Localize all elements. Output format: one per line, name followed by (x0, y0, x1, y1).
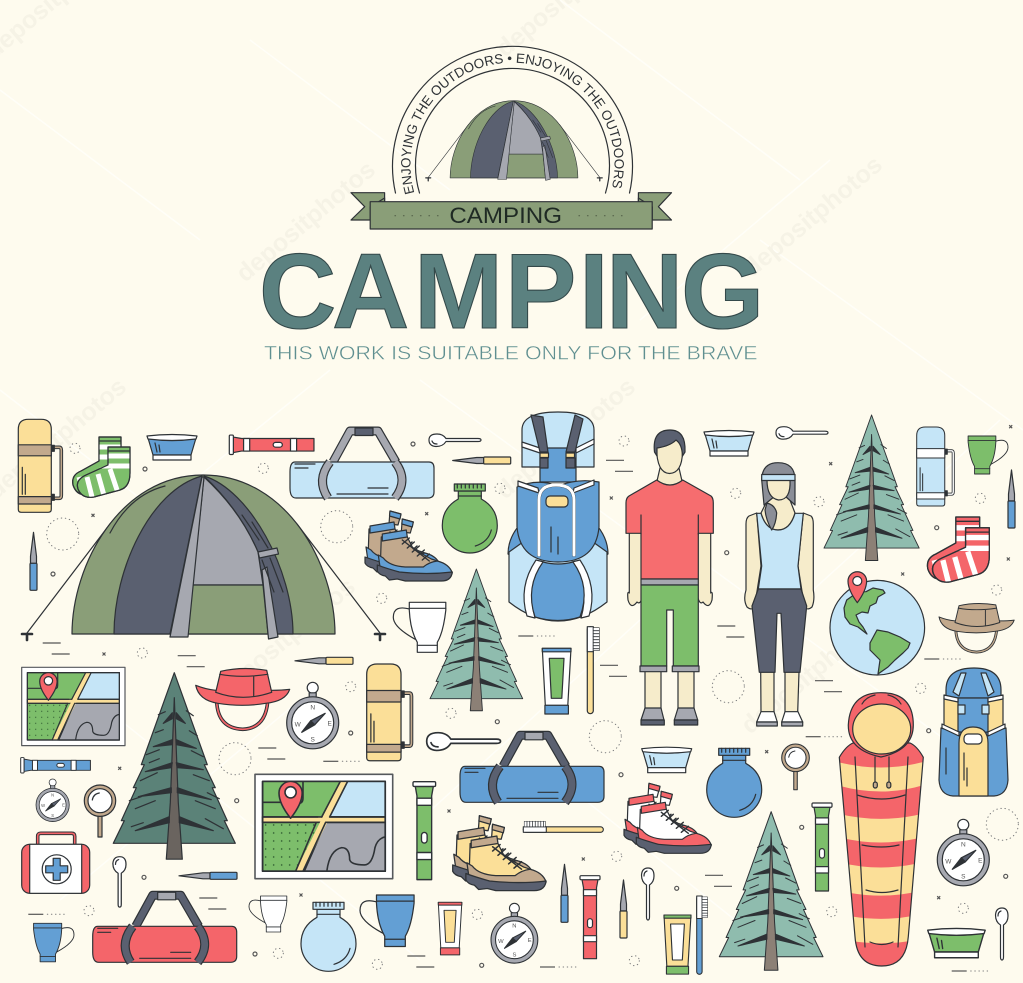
ribbon folds (370, 198, 652, 207)
icon: toothpaste yellow (664, 915, 691, 974)
icon: pine tree top right (824, 415, 919, 560)
stock photo watermark: depositphotos (211, 572, 361, 705)
icon: compass right: W (945, 858, 952, 865)
icon: small compass: E (62, 803, 65, 808)
icon: small compass: W (41, 803, 45, 808)
icon: green canteen (442, 484, 497, 553)
stock photo watermark: depositphotos (231, 155, 381, 288)
bag hood (848, 693, 913, 757)
woman left shoe (757, 712, 777, 722)
icon: compass right (937, 819, 989, 886)
man belt (641, 579, 698, 585)
icon: magnifier left (84, 785, 116, 837)
icon: red flashlight (229, 435, 314, 454)
stock photo watermark: depositphotos (738, 150, 888, 283)
icon: sleeping bag (838, 692, 924, 967)
icon: blue knife right (1008, 470, 1015, 528)
icon: spoon top right (776, 427, 828, 439)
icon: dark pine tree (113, 673, 235, 859)
icon: toothbrush yellow (587, 627, 599, 714)
icon: small backpack (939, 668, 1008, 796)
bag drawcords (875, 757, 889, 783)
icon: large tent (22, 475, 385, 640)
icon: globe with pin (830, 572, 925, 675)
icon: red hat (196, 669, 290, 729)
icon: small compass: S (51, 813, 54, 818)
icon: tan hiking boots (365, 511, 452, 581)
bag opening (853, 704, 911, 754)
ribbon band (370, 202, 652, 229)
icon: compass bottom: N (512, 924, 517, 930)
decorative marks (28, 425, 1018, 971)
icon: large compass: S (311, 736, 316, 743)
icon: blue knife bottom (561, 864, 568, 922)
icon: small map (22, 667, 125, 746)
emblem tent icon (426, 101, 602, 181)
pack lower section (509, 542, 607, 621)
icon: green flashlight right (812, 803, 832, 891)
icon: compass bottom (491, 903, 538, 963)
icon: light pine tree bottom (719, 812, 823, 970)
icon: toothpaste green (542, 648, 571, 714)
man left shoe (641, 708, 664, 720)
icon: red rolled mat (93, 892, 237, 962)
icon: spoon (429, 434, 481, 446)
icon: large compass (287, 682, 339, 749)
pack main body (517, 481, 599, 562)
icon: white cup small (249, 896, 287, 932)
icon: toothpaste red (438, 902, 462, 955)
icon: woman in blue tank top (745, 463, 814, 726)
icon: large compass: N (310, 704, 315, 711)
south america (870, 630, 910, 674)
icon: spoon bottom right (996, 908, 1008, 960)
icon: large spoon (427, 733, 501, 750)
icon: knife blue handle (179, 872, 237, 879)
icon: red hiking boots (624, 783, 711, 853)
arched slogan text: ENJOYING THE OUTDOORS • ENJOYING THE OUTDOORS (401, 54, 624, 194)
woman neck and chest (761, 495, 795, 530)
pack side pockets (508, 522, 608, 562)
icon: compass bottom: E (528, 938, 532, 944)
ribbon label: CAMPING (449, 203, 562, 228)
bag seams (855, 757, 908, 947)
icon: tan hat (939, 603, 1014, 652)
woman tank top (757, 513, 803, 589)
icon: first aid kit (22, 833, 90, 893)
icon: light blue thermos (917, 427, 953, 506)
stock photo watermark: depositphotos (491, 372, 641, 505)
bag body stripes (840, 744, 923, 966)
icon: compass bottom: W (498, 939, 504, 945)
pack top section (522, 412, 594, 467)
woman headband (762, 474, 795, 480)
man right shoe (674, 708, 698, 720)
woman legs (761, 672, 799, 712)
icon: green bowl (928, 928, 985, 958)
icon: compass right: S (961, 873, 966, 880)
icon: compass right: E (978, 857, 983, 864)
woman hair (762, 463, 795, 505)
icon: knife yellow handle (453, 457, 511, 464)
woman ponytail (765, 503, 777, 530)
icon: green flashlight (413, 782, 436, 880)
camping badge emblem (350, 46, 672, 230)
icon: man in red shirt (626, 430, 713, 725)
icon: large backpack (508, 412, 608, 621)
stock photo watermark: depositphotos (736, 607, 886, 740)
icon: magnifier right (782, 744, 809, 790)
icon: blue cup small (34, 923, 74, 962)
woman face (767, 480, 790, 500)
woman capri pants (752, 589, 807, 672)
man left leg (645, 671, 661, 709)
icon: blue canteen (707, 748, 762, 817)
icon: knife yellow handle lower (295, 657, 353, 664)
man right leg (678, 671, 694, 709)
woman arms (745, 513, 814, 609)
badge arch frame (393, 46, 632, 193)
icon: light blue bowl lower (642, 747, 692, 773)
icon: blue knife (30, 532, 37, 590)
icon: red socks (927, 517, 994, 586)
icon: green cup (968, 436, 1008, 474)
icon: blue flashlight (21, 758, 90, 773)
icon: blue bowl (147, 434, 197, 460)
icon: spoon bottom left (113, 857, 126, 907)
icon: blue cup large (360, 895, 414, 946)
man face (656, 440, 682, 474)
north america (844, 588, 885, 634)
icon: large map (255, 774, 393, 879)
bag outline (839, 743, 923, 966)
icon: light blue canteen (301, 902, 356, 971)
subtitle: THIS WORK IS SUITABLE ONLY FOR THE BRAVE (264, 342, 758, 364)
ribbon dots (395, 215, 622, 217)
man neck (657, 468, 682, 486)
icon: yellow thermos (18, 419, 61, 512)
icon: small compass (36, 779, 69, 822)
icon: toothbrush horizontal (523, 821, 603, 832)
ribbon right tail (638, 193, 672, 220)
icon: large compass: E (328, 720, 333, 727)
icon: yellow knife bottom (620, 880, 627, 938)
icon: red flashlight vertical (580, 876, 600, 959)
ribbon left tail (351, 193, 385, 220)
icon: large compass: W (295, 721, 302, 728)
main title: CAMPING (259, 231, 764, 351)
icon set (18, 412, 1015, 974)
icon: compass right: N (961, 841, 966, 848)
icon: small compass: N (51, 792, 54, 797)
icon: light blue bowl (704, 430, 754, 456)
man hair (654, 430, 685, 456)
man shorts (641, 585, 698, 666)
icon: light blue rolled mat (290, 428, 434, 498)
icon: spoon bottom center (642, 868, 654, 920)
man arms (628, 532, 712, 606)
icon: yellow hiking boots (453, 816, 546, 891)
icon: light pine tree (430, 569, 523, 711)
icon: white cup (393, 602, 446, 652)
man shirt (626, 480, 713, 579)
icon: green socks (73, 437, 134, 501)
map pin (848, 572, 867, 603)
icon: compass bottom: S (512, 952, 516, 958)
icon: yellow thermos lower (367, 664, 411, 761)
woman right shoe (782, 712, 803, 722)
icon: blue rolled mat (460, 732, 604, 802)
icon: toothbrush blue (697, 896, 708, 974)
